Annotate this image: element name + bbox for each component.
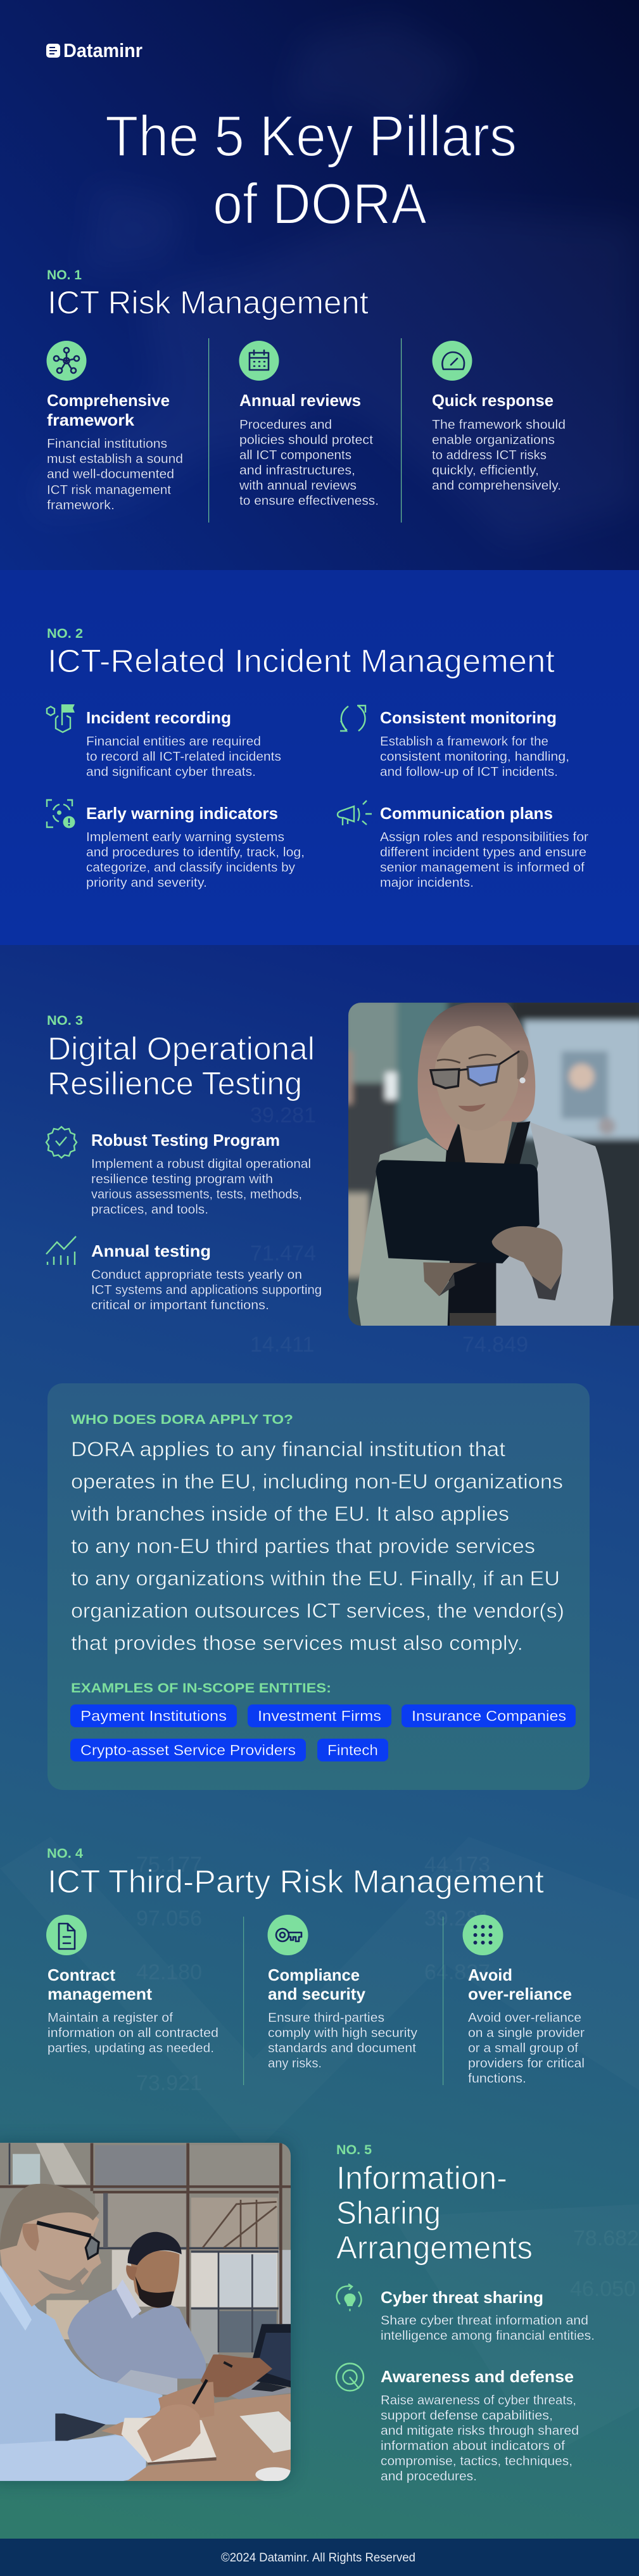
early warning indicators (86, 804, 305, 890)
annual testing: Annual testing (91, 1241, 211, 1260)
robust testing program (91, 1131, 311, 1217)
icon: early warning (47, 800, 75, 828)
annual reviews: all ICT components (239, 448, 351, 462)
contract management: Contract (47, 1965, 115, 1984)
face (435, 1026, 519, 1131)
robust testing program: resilience testing program with (91, 1172, 273, 1186)
incident recording: Incident recording (86, 708, 231, 727)
callout heading: WHO DOES DORA APPLY TO? (71, 1412, 293, 1427)
compliance and security: any risks. (268, 2056, 322, 2071)
awareness and defense (381, 2367, 579, 2484)
quick response: and comprehensively. (432, 478, 561, 493)
laptop (250, 2324, 291, 2387)
tag: investment firms: Investment Firms (258, 1708, 381, 1724)
section heading: ICT-Related Incident Management (47, 643, 555, 679)
background: faint market data texture: 39.281 (250, 1103, 316, 1127)
notebook (122, 2418, 217, 2463)
icon: gauge (432, 341, 472, 381)
background: faint market data texture: 42.180 (136, 1960, 202, 1984)
tag: crypto-asset service providers (70, 1739, 306, 1761)
communication plans: senior management is informed of (380, 860, 585, 875)
cyber threat sharing: Share cyber threat information and (381, 2313, 588, 2328)
annual testing: Conduct appropriate tests yearly on (91, 1267, 302, 1282)
background: faint market data texture: 74.849 (462, 1333, 528, 1357)
compliance and security (268, 1965, 418, 2071)
section heading: ICT Third-Party Risk Management (47, 1863, 544, 1900)
cyber threat sharing: Cyber threat sharing (381, 2288, 543, 2307)
footer (0, 2539, 639, 2576)
robust testing program: Implement a robust digital operational (91, 1157, 311, 1171)
comprehensive framework: and well-documented (47, 467, 174, 481)
avoid over-reliance: functions. (468, 2071, 526, 2086)
avoid over-reliance (468, 1965, 585, 2086)
photo: woman reading a tablet (344, 998, 639, 1330)
awareness and defense: and procedures. (381, 2469, 477, 2484)
logo (46, 39, 142, 61)
annual testing (91, 1241, 322, 1312)
section heading: Arrangements (336, 2230, 533, 2266)
consistent monitoring: consistent monitoring, handling, (380, 749, 569, 764)
glasses (37, 2223, 91, 2236)
tablet (376, 1160, 540, 1264)
glasses (431, 1069, 459, 1088)
icon: line chart (46, 1236, 76, 1265)
cyber threat sharing (381, 2288, 595, 2343)
jacket (357, 1138, 450, 1326)
icon: badge check (46, 1127, 77, 1158)
annual reviews (239, 391, 379, 508)
comprehensive framework: Comprehensive (47, 391, 170, 410)
background: faint market data texture: 73.921 (136, 2071, 202, 2095)
icon: refresh arrows (340, 706, 365, 731)
tag: insurance companies (402, 1704, 576, 1727)
panel: pillar 2 incident management (47, 626, 588, 890)
icon: calendar (239, 341, 279, 381)
icon: flag shield (47, 704, 75, 732)
tag: crypto-asset service providers: Crypto-asset Service Providers (80, 1742, 296, 1758)
belt (450, 1313, 496, 1326)
keyboard (239, 2411, 291, 2452)
hair (418, 1003, 535, 1150)
contract management: management (47, 1984, 152, 2003)
quick response: quickly, efficiently, (432, 463, 539, 478)
section number: NO. 3 (47, 1013, 83, 1028)
brows and mouth (437, 1055, 496, 1063)
early warning indicators: Implement early warning systems (86, 830, 284, 844)
background: faint market data texture: 46.050 (570, 2277, 636, 2301)
annual reviews: policies should protect (239, 433, 373, 447)
consistent monitoring: and follow-up of ICT incidents. (380, 765, 558, 779)
background: faint market data texture: 44.173 (424, 1853, 490, 1877)
background: section 1 (0, 0, 639, 570)
early warning indicators: categorize, and classify incidents by (86, 860, 296, 875)
cyber threat sharing: intelligence among financial entities. (381, 2328, 595, 2343)
examples heading: EXAMPLES OF IN-SCOPE ENTITIES: (71, 1681, 331, 1696)
icon: dot grid (462, 1915, 503, 1955)
title (105, 105, 517, 236)
quick response: to address ICT risks (432, 448, 547, 462)
panel: pillar 4 third-party risk (46, 1846, 585, 2086)
panel: who does DORA apply to (47, 1383, 590, 1790)
background: sections 3 to 5 (0, 945, 639, 2539)
section number: NO. 4 (47, 1846, 83, 1861)
collar (445, 1123, 465, 1163)
icon: document (46, 1915, 87, 1955)
awareness and defense: support defense capabilities, (381, 2408, 553, 2423)
section heading (47, 1031, 315, 1101)
first man head (0, 2204, 101, 2307)
section number: NO. 1 (47, 268, 82, 282)
callout text: organization outsources ICT services, the vendor(s) (71, 1599, 564, 1622)
mouse (255, 2467, 293, 2482)
callout text: operates in the EU, including non-EU organizations (71, 1470, 563, 1493)
background: faint market data texture: 14.411 (250, 1333, 314, 1357)
tag: fintech (317, 1739, 388, 1761)
icon: Dataminr mark (46, 44, 60, 58)
background: faint market data texture (0, 1103, 639, 2458)
incident recording: to record all ICT-related incidents (86, 749, 281, 764)
robust testing program: Robust Testing Program (91, 1131, 280, 1150)
avoid over-reliance: Avoid (468, 1965, 512, 1984)
communication plans: Assign roles and responsibilities for (380, 830, 588, 844)
awareness and defense: Raise awareness of cyber threats, (381, 2393, 576, 2408)
photo shadow (0, 2143, 291, 2481)
cuffs (532, 1273, 562, 1300)
annual reviews: with annual reviews (239, 478, 357, 493)
icon: target (336, 2364, 364, 2390)
tag: fintech: Fintech (327, 1742, 378, 1758)
comprehensive framework (47, 391, 183, 512)
awareness and defense: and mitigate risks through shared (381, 2423, 579, 2438)
incident recording: Financial entities are required (86, 734, 261, 749)
first man shirt (0, 2265, 163, 2481)
callout text: that provides those services must also comply. (71, 1632, 523, 1654)
callout text (70, 1438, 564, 1654)
tag: payment institutions: Payment Institutions (80, 1708, 227, 1724)
footer: ©2024 Dataminr. All Rights Reserved (221, 2551, 415, 2565)
compliance and security: comply with high security (268, 2026, 418, 2040)
comprehensive framework: framework (47, 410, 135, 429)
early warning indicators: Early warning indicators (86, 804, 278, 823)
title: The 5 Key Pillars (105, 105, 517, 168)
background: faint market data texture: 39.281 (424, 1907, 490, 1931)
tag: payment institutions (70, 1704, 237, 1727)
tag: investment firms (248, 1704, 391, 1727)
background: faint market data texture: 78.682 (573, 2226, 639, 2250)
background: faint market data texture: 71.474 (250, 1241, 316, 1266)
background: section 2 (0, 570, 639, 945)
section heading: ICT Risk Management (47, 284, 369, 320)
panel: pillar 5 information sharing (0, 2141, 595, 2484)
comprehensive framework: ICT risk management (47, 483, 171, 497)
compliance and security: and security (268, 1984, 366, 2003)
consistent monitoring: Consistent monitoring (380, 708, 557, 727)
annual reviews: to ensure effectiveness. (239, 493, 379, 508)
section heading: Information- (336, 2160, 507, 2196)
tag: insurance companies: Insurance Companies (412, 1708, 566, 1724)
communication plans: Communication plans (380, 804, 553, 823)
avoid over-reliance: Avoid over-reliance (468, 2010, 581, 2025)
comprehensive framework: Financial institutions (47, 436, 167, 451)
annual reviews: Procedures and (239, 417, 332, 432)
ear (517, 1050, 528, 1079)
annual testing: critical or important functions. (91, 1298, 269, 1312)
neck (460, 1121, 512, 1164)
awareness and defense: compromise, tactics, techniques, (381, 2454, 573, 2468)
section number: NO. 5 (336, 2143, 372, 2157)
hands (492, 1226, 562, 1290)
background: map of Europe (32, 19, 639, 545)
inner top (448, 1260, 496, 1326)
contract management: information on all contracted (47, 2026, 218, 2040)
awareness and defense: information about indicators of (381, 2439, 565, 2453)
icon: network (47, 341, 86, 381)
compliance and security: Compliance (268, 1965, 360, 1984)
contract management (47, 1965, 218, 2055)
title: of DORA (213, 172, 427, 236)
quick response: The framework should (432, 417, 566, 432)
quick response: enable organizations (432, 433, 555, 447)
contract management: Maintain a register of (47, 2010, 173, 2025)
panel: pillar 1 ICT risk management (47, 268, 566, 523)
incident recording (86, 708, 281, 779)
callout text: to any non-EU third parties that provide services (71, 1535, 535, 1558)
wordmark: Dataminr (63, 39, 142, 61)
section heading: Sharing (336, 2195, 441, 2231)
callout text: with branches inside of the EU. It also applies (70, 1502, 509, 1525)
robust testing program: practices, and tools. (91, 1202, 208, 1217)
icon: threat sharing (337, 2284, 361, 2311)
consistent monitoring: Establish a framework for the (380, 734, 548, 749)
annual testing: ICT systems and applications supporting (91, 1283, 322, 1297)
background: faint market data texture: 97.056 (136, 1907, 202, 1931)
avoid over-reliance: providers for critical (468, 2056, 585, 2071)
photo: two colleagues at a desk (0, 2141, 304, 2483)
second man head (131, 2250, 179, 2308)
icon: megaphone (338, 801, 372, 825)
panel: pillar 3 resilience testing (46, 998, 639, 1330)
compliance and security: Ensure third-parties (268, 2010, 384, 2025)
background: faint market data texture: 64.827 (424, 1960, 490, 1984)
annual reviews: and infrastructures, (239, 463, 355, 478)
callout text: DORA applies to any financial institution that (71, 1438, 505, 1461)
section heading: Resilience Testing (47, 1065, 302, 1101)
annual reviews: Annual reviews (239, 391, 361, 410)
hands (201, 2354, 272, 2397)
comprehensive framework: framework. (47, 498, 115, 512)
background: faint market data texture: 75.177 (136, 1853, 202, 1877)
awareness and defense: Awareness and defense (381, 2367, 574, 2386)
section heading: Digital Operational (47, 1031, 315, 1067)
early warning indicators: and procedures to identify, track, log, (86, 845, 305, 860)
second man shirt (68, 2283, 206, 2394)
robust testing program: various assessments, tests, methods, (91, 1187, 302, 1202)
communication plans: major incidents. (380, 875, 474, 890)
avoid over-reliance: over-reliance (468, 1984, 572, 2003)
quick response (432, 391, 566, 493)
contract management: parties, updating as needed. (47, 2041, 214, 2055)
quick response: Quick response (432, 391, 554, 410)
icon: key (267, 1915, 308, 1955)
consistent monitoring (380, 708, 569, 779)
incident recording: and significant cyber threats. (86, 765, 256, 779)
table (101, 2394, 291, 2481)
avoid over-reliance: on a single provider (468, 2026, 585, 2040)
compliance and security: standards and document (268, 2041, 416, 2055)
communication plans: different incident types and ensure (380, 845, 586, 860)
callout text: to any organizations within the EU. Finally, if an EU (71, 1567, 560, 1590)
communication plans (380, 804, 588, 890)
comprehensive framework: must establish a sound (47, 452, 183, 466)
section number: NO. 2 (47, 626, 83, 641)
section heading (336, 2160, 533, 2266)
avoid over-reliance: or a small group of (468, 2041, 578, 2055)
early warning indicators: priority and severity. (86, 875, 207, 890)
